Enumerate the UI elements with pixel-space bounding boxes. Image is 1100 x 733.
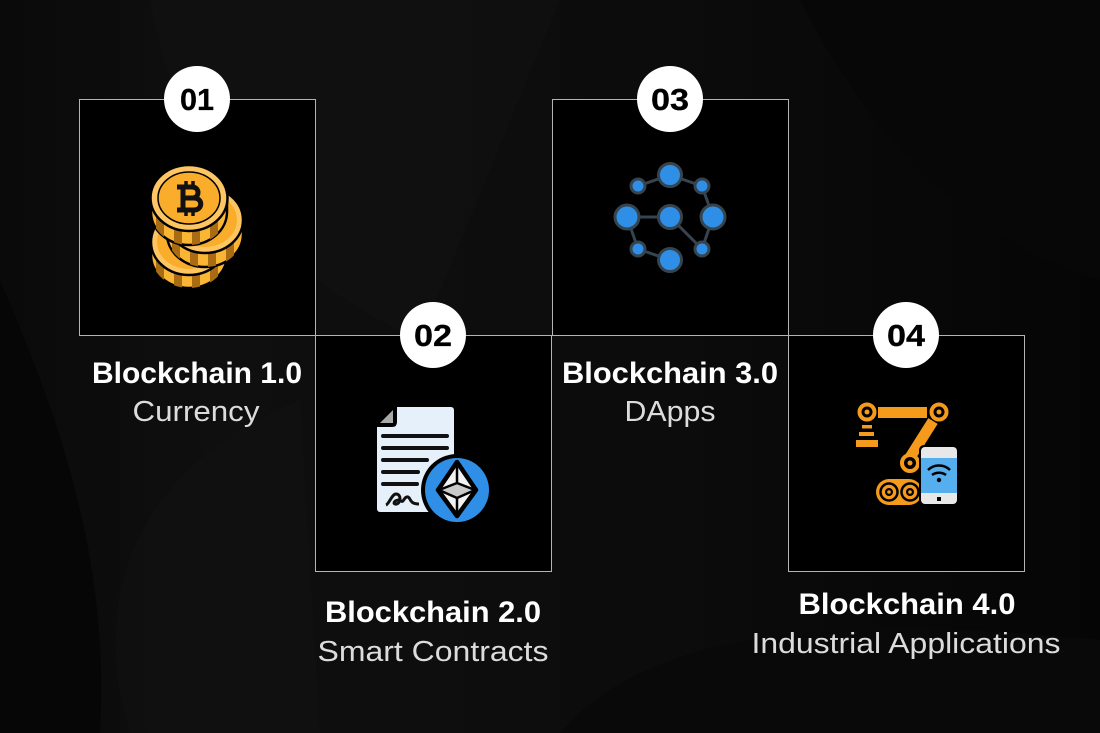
badge 01 xyxy=(164,66,230,132)
badge 02: 02 xyxy=(414,318,452,353)
subtitle 2: Smart Contracts xyxy=(318,636,548,668)
icon: network nodes xyxy=(615,164,725,272)
heading 2: Blockchain 2.0 xyxy=(325,596,541,629)
panel: Blockchain 2.0 xyxy=(316,336,552,668)
subtitle 1: Currency xyxy=(132,396,260,428)
heading 3: Blockchain 3.0 xyxy=(562,357,778,390)
heading 4: Blockchain 4.0 xyxy=(798,588,1016,621)
panel: Blockchain 1.0 xyxy=(80,100,316,428)
icon: contract with ethereum xyxy=(377,407,493,526)
badge 04 xyxy=(873,302,939,368)
badge 03 xyxy=(637,66,703,132)
icon: stacked bitcoin coins xyxy=(150,165,243,292)
badge 02 xyxy=(400,302,466,368)
panel: Blockchain 3.0 xyxy=(552,100,788,428)
badge 01: 01 xyxy=(180,82,214,117)
panel: Blockchain 4.0 xyxy=(752,336,1060,660)
subtitle 4: Industrial Applications xyxy=(752,628,1060,660)
subtitle 3: DApps xyxy=(624,396,716,428)
badge 03: 03 xyxy=(651,82,689,117)
infographic canvas xyxy=(79,66,1060,662)
box 4 xyxy=(788,336,1024,572)
icon: robot arm and phone xyxy=(856,404,959,506)
heading 1: Blockchain 1.0 xyxy=(92,357,302,390)
badge 04: 04 xyxy=(887,318,926,353)
box 3 xyxy=(552,100,788,336)
box 2 xyxy=(316,336,552,572)
box 1 xyxy=(80,100,316,336)
